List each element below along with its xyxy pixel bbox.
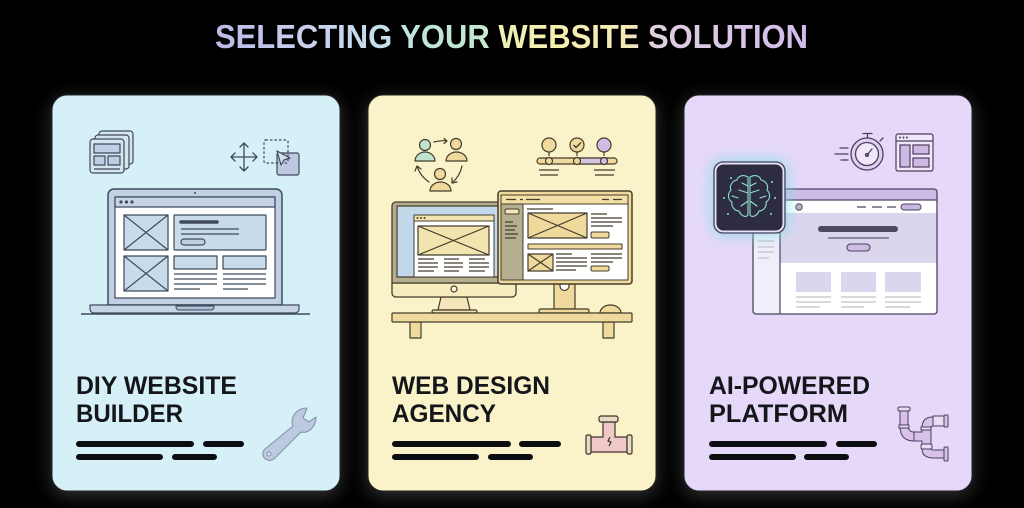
illustration: left monitor xyxy=(392,202,516,297)
icon: move arrows xyxy=(231,143,257,171)
heading: BUILDER xyxy=(76,400,183,428)
panel: AI-powered platform xyxy=(684,95,972,491)
panel: web design agency xyxy=(368,95,656,491)
redacted text bars xyxy=(712,444,874,457)
icon: stopwatch with speed lines xyxy=(835,134,883,170)
icon: wrench xyxy=(263,408,316,460)
card background xyxy=(684,95,972,491)
illustration: laptop with wireframe xyxy=(81,189,310,314)
illustration: right monitor xyxy=(498,191,632,284)
heading: WEB DESIGN xyxy=(392,372,550,400)
icon: AI brain chip xyxy=(711,159,788,236)
heading: AI-POWERED xyxy=(709,372,870,400)
heading: DIY WEBSITE xyxy=(76,372,237,400)
icon: project timeline xyxy=(537,138,617,175)
icon: cracked pipe tee xyxy=(586,416,632,454)
panel: DIY website builder xyxy=(52,95,340,491)
icon: layered page templates xyxy=(90,131,133,173)
card background xyxy=(52,95,340,491)
redacted text bars xyxy=(395,444,558,457)
heading: AGENCY xyxy=(392,400,496,428)
card background xyxy=(368,95,656,491)
illustration: desk xyxy=(392,284,632,338)
heading: PLATFORM xyxy=(709,400,848,428)
icon: connected pipes xyxy=(898,407,948,461)
illustration: browser window xyxy=(753,189,937,314)
icon: team collaboration cycle xyxy=(415,138,467,191)
icon: layout window xyxy=(896,134,933,171)
redacted text bars xyxy=(79,444,241,457)
title: SELECTING YOUR WEBSITE SOLUTION xyxy=(215,18,808,55)
icon: drag selection with cursor xyxy=(264,140,299,175)
